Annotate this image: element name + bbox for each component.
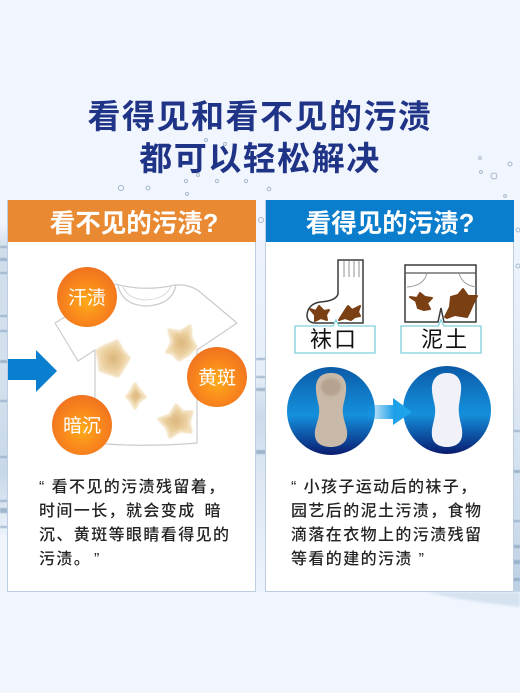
after: clean pad	[403, 366, 491, 454]
label: mud: 泥土	[421, 327, 469, 352]
icon: muddy sock	[307, 260, 363, 323]
arrow: before to after	[367, 398, 412, 425]
badge: dullness	[52, 395, 112, 455]
header: invisible stains: 看不见的污渍?	[50, 210, 218, 238]
badge: sweat stain: 汗渍	[68, 287, 106, 309]
badge: sweat stain	[57, 267, 117, 327]
text block: invisible stains: 时间一长，就会变成 暗	[39, 501, 222, 520]
panel background left	[8, 200, 256, 592]
title	[88, 98, 432, 177]
badge: dullness: 暗沉	[63, 415, 101, 437]
text block: invisible stains: 污渍。 ”	[39, 550, 101, 568]
text block: visible stains: 园艺后的泥土污渍，食物	[291, 501, 482, 520]
before: dirty pad	[287, 367, 375, 455]
text block: visible stains: 滴落在衣物上的污渍残留	[291, 526, 482, 544]
header: invisible stains	[8, 200, 256, 242]
text block: invisible stains: “ 看不见的污渍残留着，	[39, 478, 226, 496]
t-shirt illustration	[55, 284, 237, 445]
text block: invisible stains	[39, 478, 230, 568]
panel: invisible stains	[8, 200, 256, 592]
header: visible stains: 看得见的污渍?	[306, 210, 474, 238]
text block: visible stains: 等看的建的污渍 ”	[291, 550, 425, 568]
title: 都可以轻松解决	[139, 140, 381, 177]
text block: visible stains: “ 小孩子运动后的袜子，	[291, 478, 478, 496]
label: sock cuff	[295, 320, 375, 353]
title: 看得见和看不见的污渍	[88, 98, 432, 135]
header: visible stains	[266, 200, 514, 242]
water droplets	[118, 138, 520, 268]
label: sock cuff: 袜口	[310, 327, 358, 352]
badge: yellow spots: 黄斑	[198, 367, 236, 389]
text block: visible stains	[291, 478, 482, 568]
panel: visible stains	[266, 200, 514, 592]
arrow: blue right	[8, 350, 57, 392]
panel background right	[266, 200, 514, 592]
stains on shirt	[97, 326, 196, 437]
label: mud	[401, 320, 481, 353]
badge: yellow spots	[187, 347, 247, 407]
icon: muddy shorts	[405, 265, 477, 322]
text block: invisible stains: 沉、黄斑等眼睛看得见的	[39, 526, 230, 544]
